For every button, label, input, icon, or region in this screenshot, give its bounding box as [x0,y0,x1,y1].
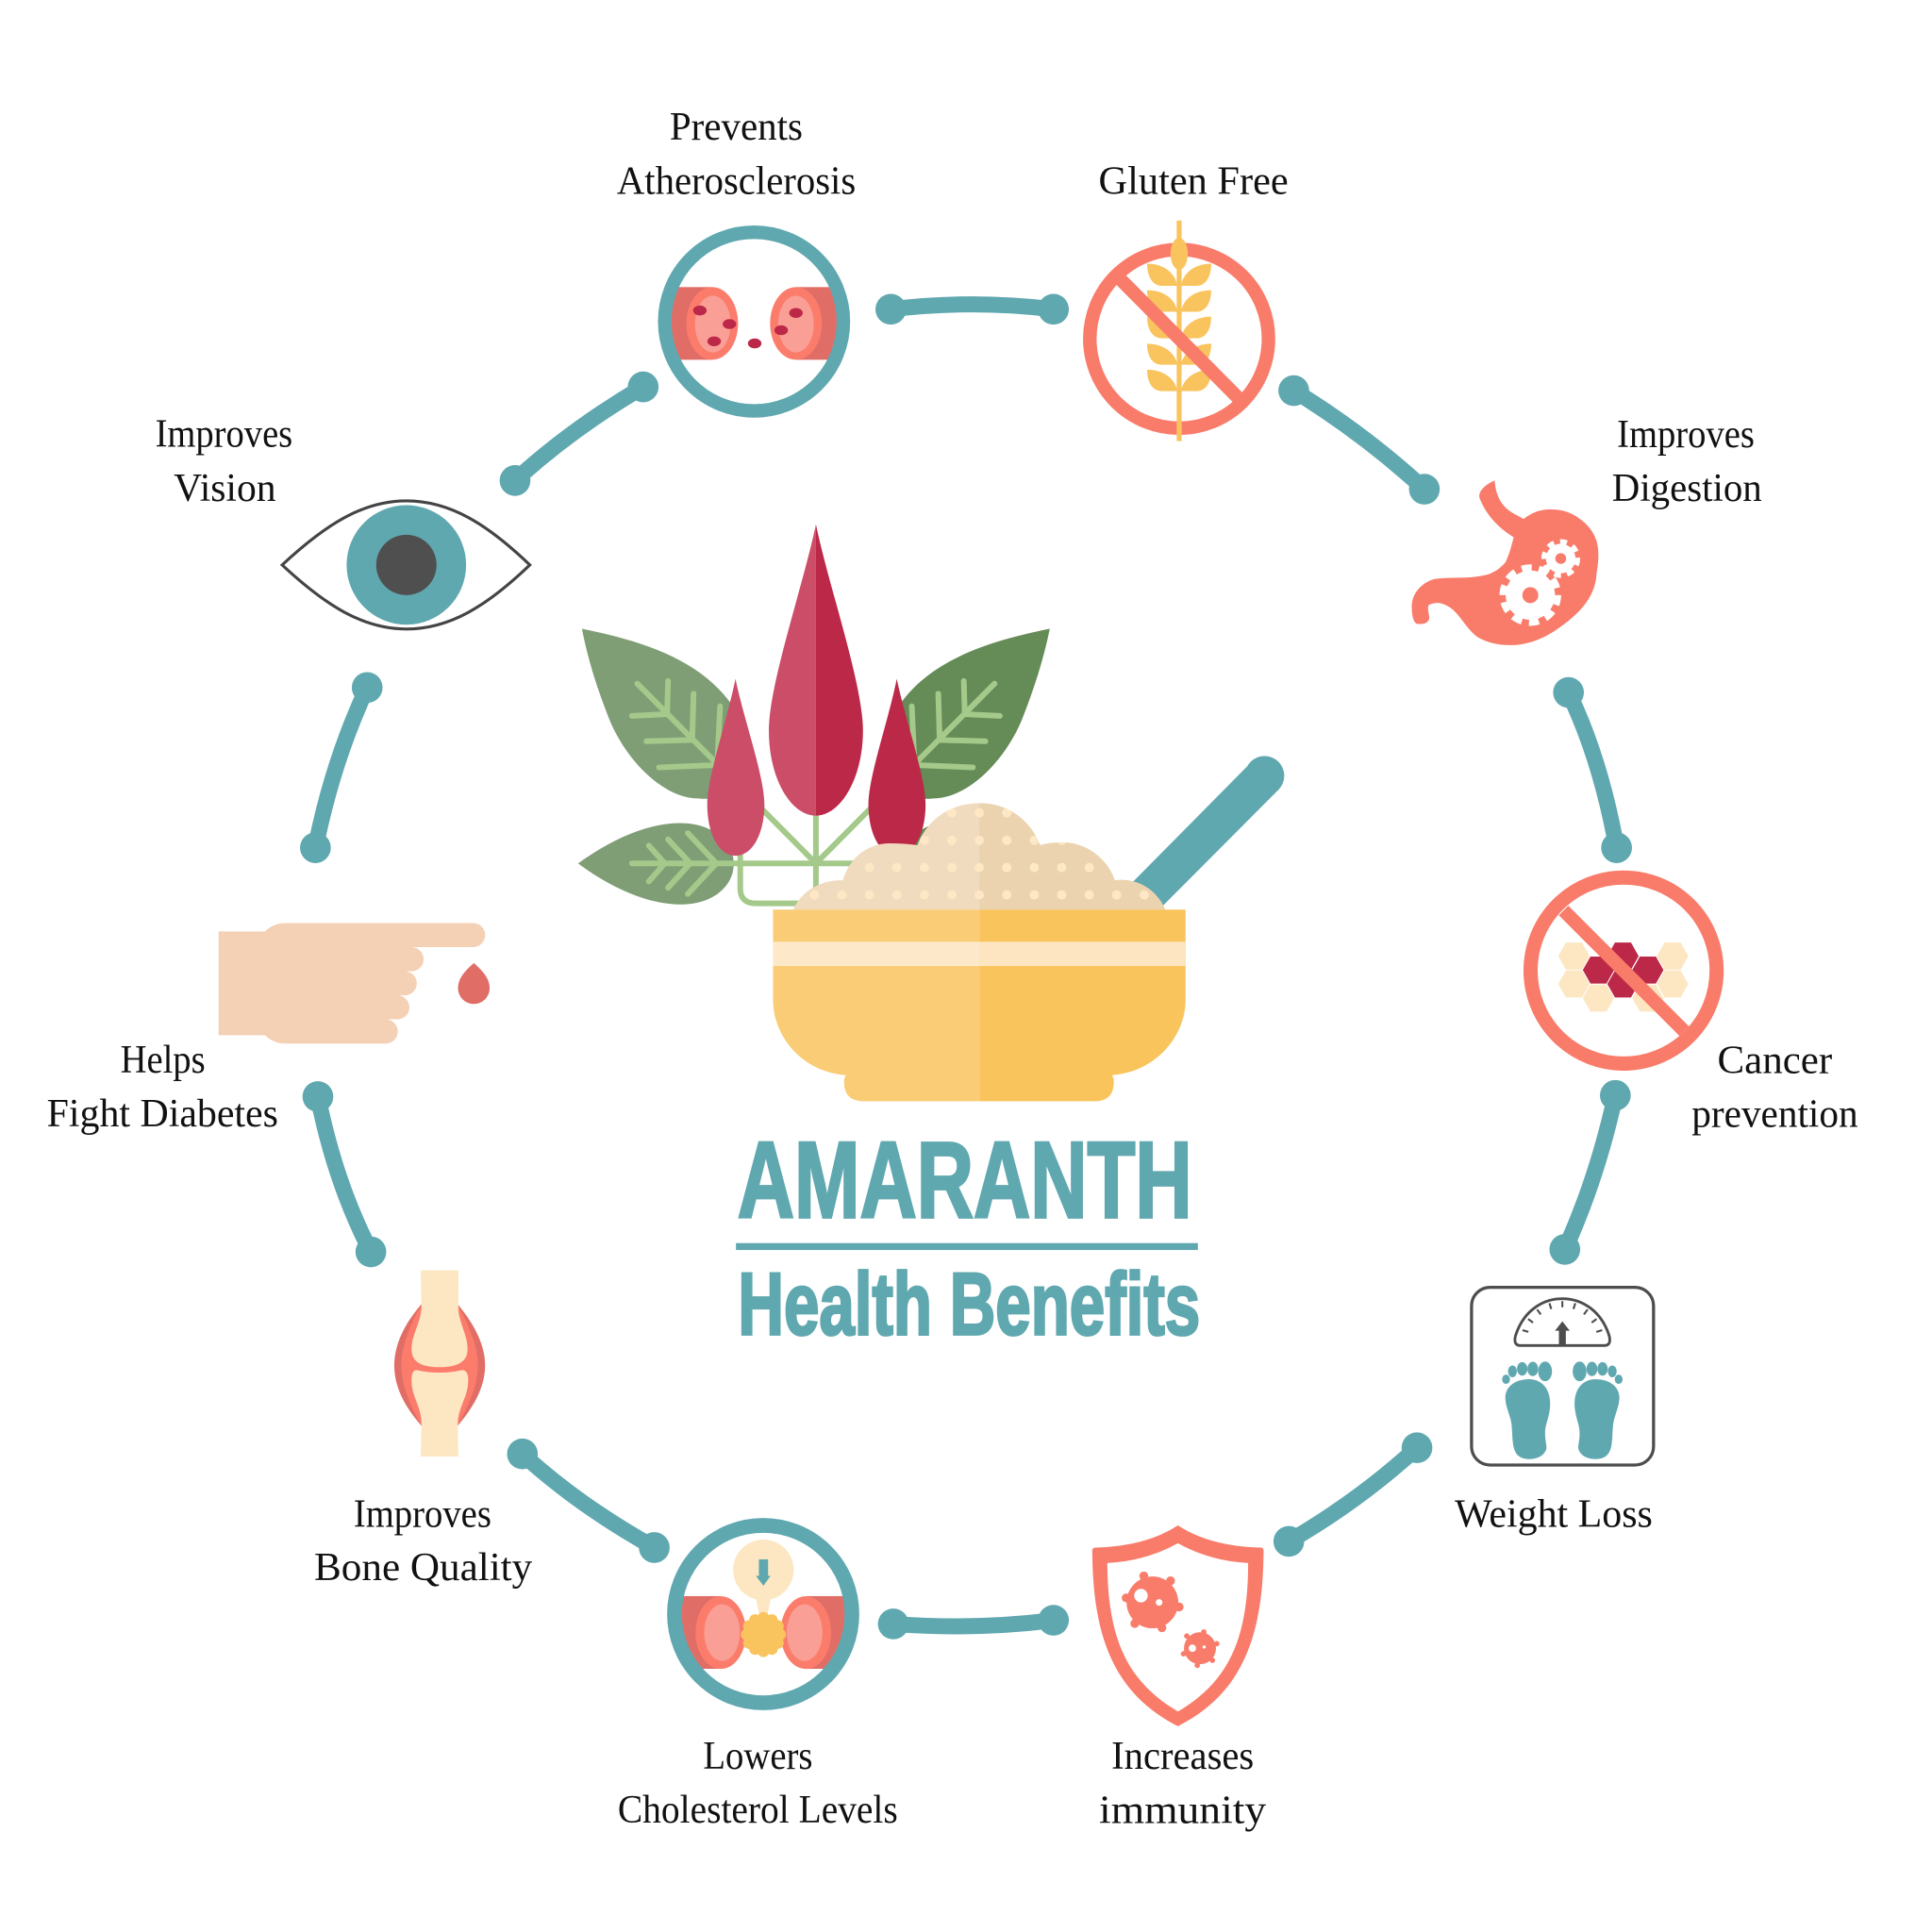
label: Helps Fight Diabetes [47,1039,278,1136]
label: Improves Digestion [1612,413,1762,510]
label: Lowers Cholesterol Levels: Cholesterol Levels [618,1789,898,1832]
label: Improves Digestion: Improves [1617,413,1755,457]
label: Helps Fight Diabetes: Helps [121,1039,206,1082]
label: Gluten Free: Gluten Free [1099,160,1289,204]
icon: finger with blood drop [219,924,490,1043]
label: Increases immunity: immunity [1099,1789,1266,1832]
icon: immunity shield with viruses [1092,1525,1264,1726]
amaranth leaves [578,629,1050,905]
label: Lowers Cholesterol Levels [618,1735,898,1832]
label: Lowers Cholesterol Levels: Lowers [703,1735,813,1778]
label: Prevents Atherosclerosis: Atherosclerosis [617,160,856,204]
bowl [773,909,1186,1101]
label: Improves Digestion: Digestion [1612,467,1762,510]
callout bubble [733,1540,793,1614]
label: Prevents Atherosclerosis: Prevents [670,106,803,149]
label: Improves Bone Quality: Bone Quality [314,1546,532,1590]
cholesterol blob [741,1612,786,1657]
icon: gluten free wheat [1090,221,1269,441]
label: Increases immunity [1099,1735,1266,1832]
label: Improves Vision [156,413,292,510]
label: Helps Fight Diabetes: Fight Diabetes [47,1092,278,1136]
icon: cancer prevention [1530,877,1717,1063]
icon: cholesterol artery [665,1525,861,1703]
label: Improves Bone Quality: Improves [354,1492,491,1536]
icon: weight scale [1472,1288,1654,1465]
label: Improves Bone Quality [314,1492,532,1590]
label: Improves Vision: Vision [174,467,276,510]
connectors ring [300,294,1632,1640]
central illustration: amaranth plant and bowl [578,525,1284,1101]
amaranth flowers [708,525,925,856]
porridge [793,801,1170,910]
label: Prevents Atherosclerosis [617,106,856,204]
title [736,1120,1200,1354]
icon: eye [282,501,530,629]
label: Cancer prevention: prevention [1691,1092,1858,1136]
icon: artery with plaque [653,232,855,411]
gears [1503,541,1577,623]
label: Cancer prevention: Cancer [1717,1039,1832,1082]
icon: stomach with gears [1411,480,1598,645]
stems and leaf veins [632,681,1000,906]
icon: knee joint [394,1271,485,1457]
label: Improves Vision: Improves [156,413,292,457]
spoon [1133,756,1284,906]
label: Increases immunity: Increases [1111,1735,1254,1778]
label: Cancer prevention [1691,1039,1858,1136]
title: AMARANTH [738,1120,1192,1241]
label: Weight Loss: Weight Loss [1455,1492,1653,1536]
title: Health Benefits [738,1255,1200,1354]
